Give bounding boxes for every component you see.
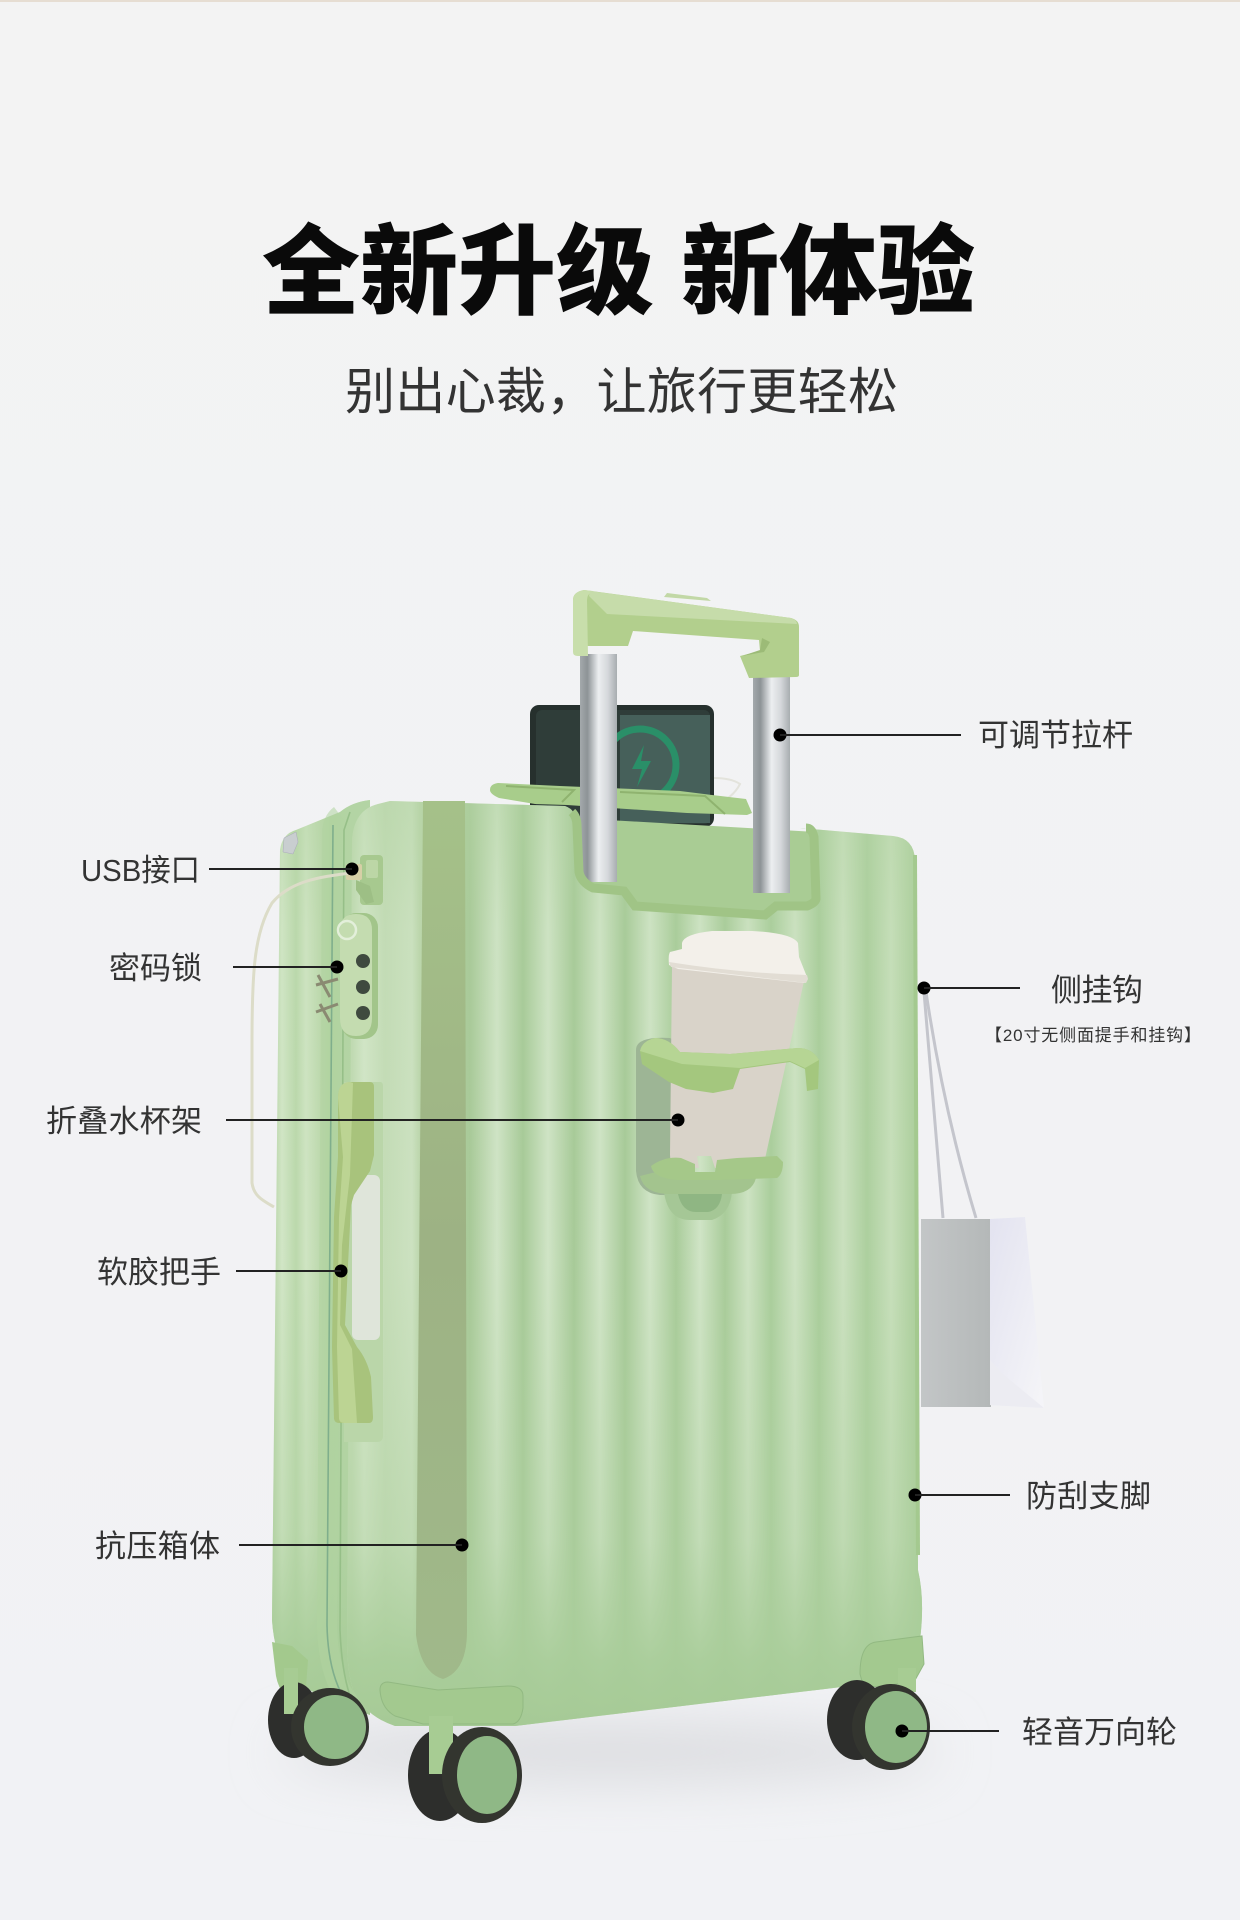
callout: folding cup holder: 折叠水杯架 [46,1104,202,1139]
top ring [640,1038,819,1093]
callout: adjustable handle: 可调节拉杆 [978,718,1133,753]
cup body [670,965,804,1168]
callout: USB port: USB接口 [81,853,200,888]
telescopic handle [573,590,799,893]
corner metal cap [283,832,298,854]
finger notch [664,1192,732,1220]
handle recess [344,1082,383,1442]
shell body [347,801,922,1726]
front shell [347,801,922,1726]
soft rubber side handle [332,1082,383,1442]
callout: USB port [81,853,358,888]
cup lid [669,931,807,983]
folding cup holder [636,931,819,1220]
subtitle: 别出心裁，让旅行更轻松 [345,364,898,420]
floor shadow [280,1722,940,1782]
lock number marks [316,975,338,1022]
recess base [640,1172,756,1194]
wide dark rib [416,801,467,1679]
handle strap [332,1082,374,1423]
handle grip [573,590,799,678]
zipper seam [327,815,349,1703]
rear wheel hidden under case [690,1672,750,1700]
shopping bag [921,1217,1044,1408]
callout: combination lock [109,951,344,986]
wheel: front left [408,1716,522,1823]
right edge highlight [915,855,918,1555]
wheel: right [827,1668,930,1770]
callout: soft handle: 软胶把手 [97,1255,221,1290]
callout: side hook [918,973,1201,1045]
right bumper corner [860,1636,924,1688]
callout: pressure-resistant body: 抗压箱体 [95,1529,220,1564]
right pole [753,675,790,893]
notch rim [572,812,816,915]
hook strings [924,992,976,1218]
left pole [580,654,617,882]
recess behind poles [574,818,818,926]
front bumper corner [380,1682,523,1724]
callout: pressure-resistant body [95,1529,468,1564]
wheel: rear left [268,1668,369,1766]
rear bumper corner [272,1642,308,1714]
combination lock [316,913,378,1039]
callout: combination lock: 密码锁 [109,951,202,986]
suitcase illustration [252,590,1044,1823]
callout: anti-scratch foot: 防刮支脚 [1026,1479,1151,1514]
fade overlay [347,801,922,1726]
callout: side hook: 侧挂钩 [1051,973,1143,1008]
callout: folding cup holder [46,1104,684,1139]
phone [530,705,740,827]
holder recess [636,1038,690,1195]
title: 全新升级 新体验 [262,217,975,327]
callout: adjustable handle [774,718,1133,753]
callout: anti-scratch foot [908,1479,1151,1514]
coffee cup [669,931,808,1168]
callout: silent spinner wheel [896,1715,1177,1750]
bottom ring [651,1156,783,1180]
callout: side hook: 【20寸无侧面提手和挂钩】 [985,1026,1201,1045]
USB port panel [346,855,383,905]
side panel [272,800,370,1715]
callout: soft handle [97,1255,348,1290]
phone tray [490,783,752,815]
charging cable [252,873,350,1207]
callout: silent spinner wheel: 轻音万向轮 [1022,1715,1177,1750]
